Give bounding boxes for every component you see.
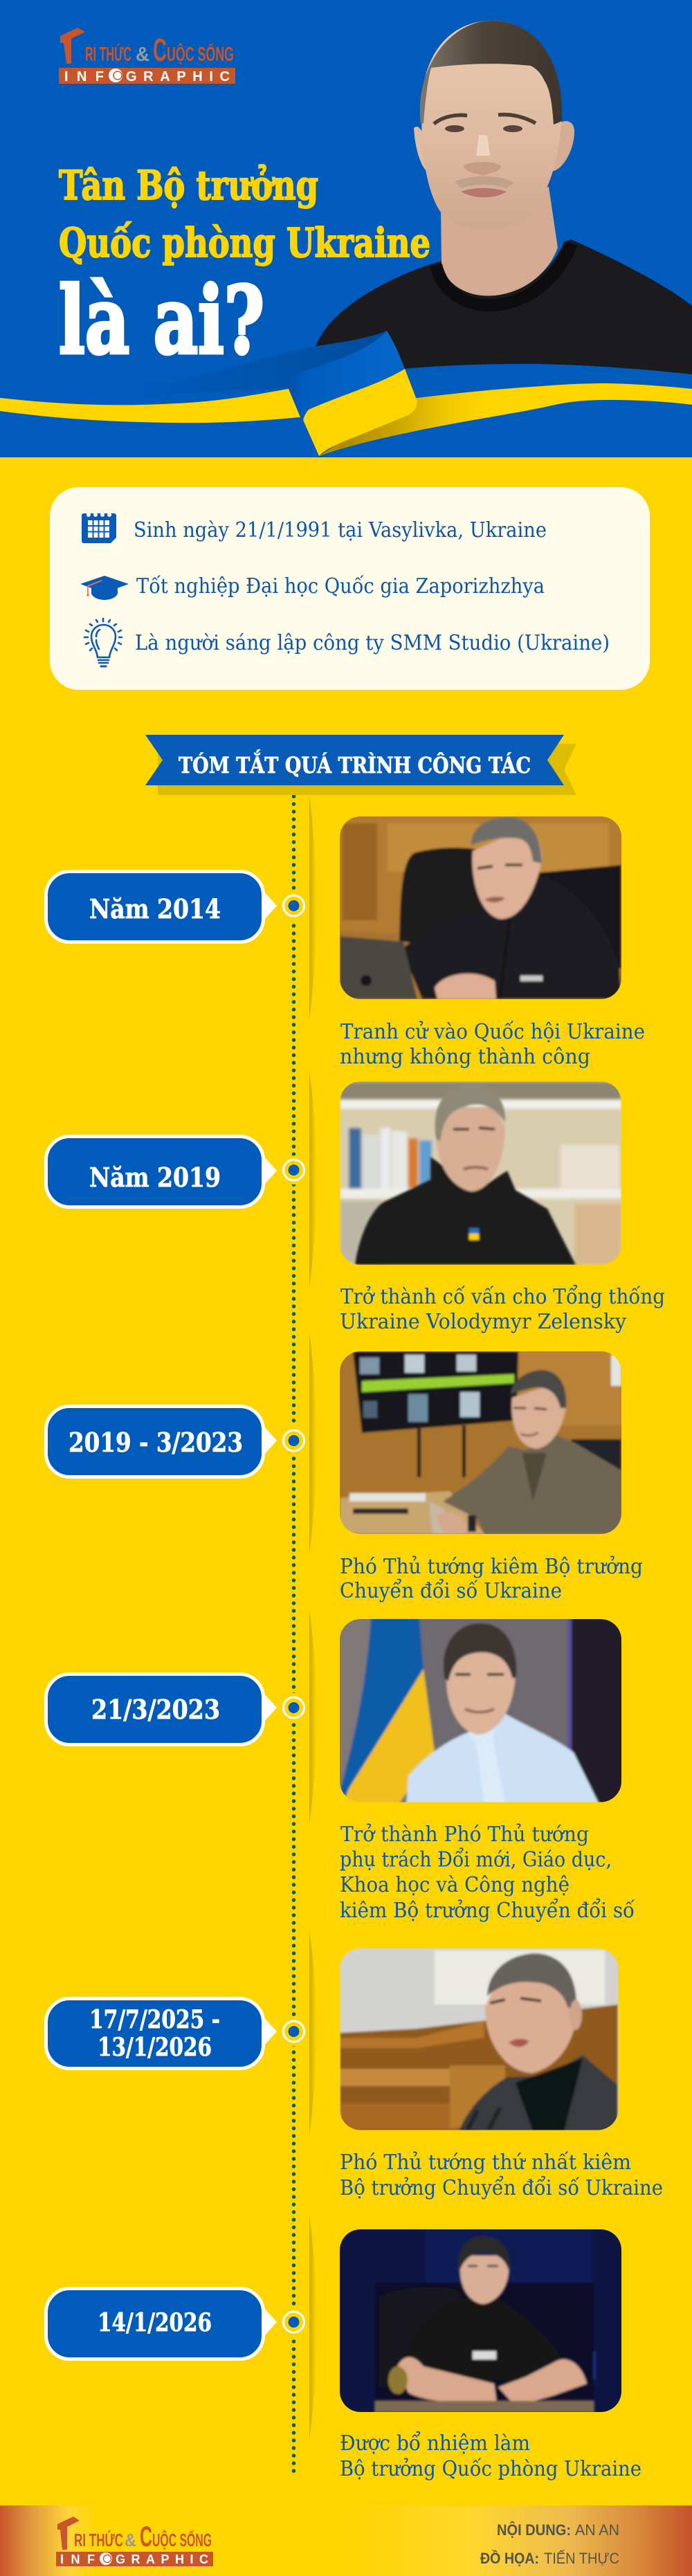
timeline row: 2019 (46, 1078, 665, 1334)
portrait of the minister (315, 21, 692, 387)
date pill (46, 2289, 277, 2359)
icon: light bulb (84, 619, 122, 666)
marker (280, 1693, 309, 1722)
caption: Phó Thủ tướng kiêm Bộ trưởng (340, 1555, 643, 1579)
timeline dotted line (292, 789, 295, 2478)
footer logo: UỘC SỐNG (152, 2530, 212, 2550)
caption: phụ trách Đổi mới, Giáo dục, (340, 1847, 612, 1872)
credit: content: AN AN (575, 2521, 619, 2539)
caption (340, 1823, 635, 1923)
caption: Được bổ nhiệm làm (340, 2431, 530, 2456)
footer logo: C (140, 2520, 152, 2552)
panel: footer (0, 2505, 692, 2576)
credit: content (497, 2521, 619, 2539)
caption: kiêm Bộ trưởng Chuyển đổi số (340, 1898, 635, 1923)
marker (280, 2308, 309, 2337)
caption: Bộ trưởng Quốc phòng Ukraine (340, 2457, 641, 2481)
photo: speaking at a microphone (336, 1944, 626, 2135)
caption (340, 1555, 643, 1603)
date pill: Năm 2019 (89, 1162, 221, 1193)
logo: Tri thuc va Cuoc song: UỘC SỐNG (167, 42, 234, 66)
logo: Tri thuc va Cuoc song: RI THỨC (85, 42, 131, 66)
photo: with Ukrainian flag (336, 1616, 626, 1806)
title: Tân Bộ trưởng (59, 162, 318, 209)
caption: Khoa học và Công nghệ (340, 1873, 570, 1897)
date pill (46, 872, 277, 942)
timeline shadow bands (309, 796, 317, 2440)
date pill (46, 1998, 277, 2069)
photo: at a desk with laptop (336, 813, 626, 1003)
footer logo: GRAPHIC (116, 2552, 208, 2566)
date pill: 13/1/2026 (98, 2033, 212, 2062)
caption (340, 1020, 645, 1069)
caption: Chuyển đổi số Ukraine (340, 1578, 562, 1603)
title: Quốc phòng Ukraine (59, 219, 430, 266)
photo: in a briefing room (336, 1348, 626, 1538)
date pill: 14/1/2026 (98, 2308, 212, 2337)
text: birth: Sinh ngày 21/1/1991 tại Vasylivka, Ukraine (134, 518, 547, 542)
caption (340, 2150, 663, 2200)
text: education: Tốt nghiệp Đại học Quốc gia Zaporizhzhya (136, 574, 545, 599)
timeline row: 2019 to 3/2023 (46, 1348, 643, 1603)
timeline row: 17/7/2025 to 13/1/2026 (46, 1944, 663, 2200)
logo: Tri thuc va Cuoc song (59, 28, 235, 84)
photo: in front of a bookshelf (336, 1078, 626, 1268)
panel: header (0, 0, 692, 457)
title (59, 162, 430, 375)
date pill (46, 1406, 277, 1477)
icon: graduation cap (80, 576, 129, 600)
logo: Tri thuc va Cuoc song: INF (64, 69, 104, 84)
caption: Trở thành cố vấn cho Tổng thống (340, 1284, 665, 1309)
caption: nhưng không thành công (340, 1045, 590, 1069)
credit: content: NỘI DUNG: (497, 2521, 571, 2539)
footer logo: RI THỨC (74, 2530, 123, 2550)
credit: graphics: TIẾN THỰC (544, 2550, 619, 2567)
caption: Ukraine Volodymyr Zelensky (340, 1310, 626, 1334)
date pill: Năm 2014 (89, 893, 221, 924)
timeline row: 2014 (46, 813, 645, 1069)
credit: graphics (480, 2550, 619, 2567)
timeline row: 21/3/2023 (46, 1616, 635, 1923)
logo: Tri thuc va Cuoc song: & (136, 44, 149, 66)
date pill (46, 1136, 277, 1207)
panel: personal summary (50, 487, 650, 690)
caption (340, 1284, 665, 1334)
date pill (46, 1674, 277, 1745)
marker (280, 1426, 309, 1455)
footer logo: & (125, 2530, 136, 2550)
footer logo (56, 2516, 213, 2566)
logo: Tri thuc va Cuoc song: C (153, 32, 167, 68)
caption: Tranh cử vào Quốc hội Ukraine (340, 1020, 645, 1044)
icon: calendar (82, 513, 116, 543)
photo: seated at a table on dark blue stage (336, 2226, 626, 2416)
text: founder: Là người sáng lập công ty SMM Studio (Ukraine) (135, 631, 610, 655)
caption: Trở thành Phó Thủ tướng (340, 1823, 589, 1847)
marker (280, 2017, 309, 2046)
ribbon: Ukrainian flag (0, 331, 692, 456)
marker (280, 1155, 309, 1185)
date pill: 2019 - 3/2023 (69, 1427, 243, 1458)
logo: Tri thuc va Cuoc song: GRAPHIC (126, 69, 230, 84)
date pill: 17/7/2025 - (89, 2005, 220, 2034)
date pill: 21/3/2023 (91, 1694, 220, 1725)
caption: Bộ trưởng Chuyển đổi số Ukraine (340, 2175, 663, 2200)
section banner: TÓM TẮT QUÁ TRÌNH CÔNG TÁC (179, 749, 531, 778)
timeline row: 14/1/2026 (46, 2226, 641, 2481)
caption (340, 2431, 641, 2481)
marker (280, 891, 309, 920)
caption: Phó Thủ tướng thứ nhất kiêm (340, 2150, 631, 2175)
footer logo: INF (60, 2552, 95, 2566)
credit: graphics: ĐỒ HỌA: (480, 2550, 539, 2567)
section banner (145, 735, 576, 795)
title: là ai? (59, 266, 264, 375)
